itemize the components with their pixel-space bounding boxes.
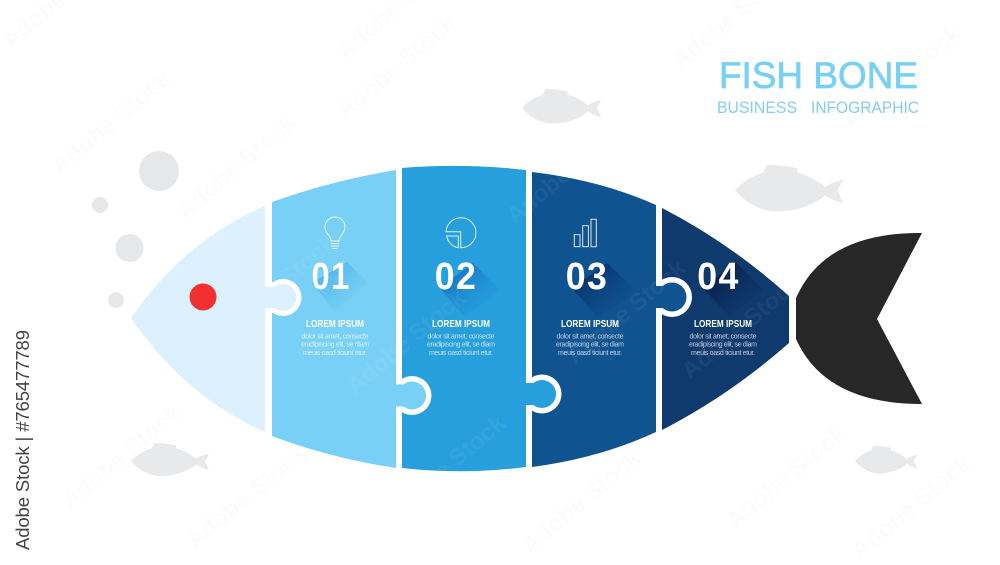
background watermarks on white: Adobe Stock xyxy=(847,449,977,565)
panel 4: darkest navy segment xyxy=(652,208,789,430)
stock watermarks: Adobe Stock xyxy=(342,284,472,400)
vertical credit line: Adobe Stock | #765477789 xyxy=(12,330,33,550)
panel 2: mid blue segment xyxy=(392,166,556,471)
body text 04: dolor sit amet, consecte xyxy=(690,333,757,340)
body text 04: meuis oasd ticiunt etur. xyxy=(691,350,755,357)
body text 03: dolor sit amet, consecte xyxy=(556,333,624,340)
body text 03 xyxy=(556,333,624,357)
body text 02: dolor sit amet, consecte xyxy=(428,333,495,340)
body text 03: meuis oasd ticiunt etur. xyxy=(558,350,622,357)
stock watermarks xyxy=(212,114,807,525)
title: FISH BONE xyxy=(719,54,918,96)
label 02: LOREM IPSUM xyxy=(432,319,490,330)
panel 1: light blue segment xyxy=(264,170,426,468)
subtitle xyxy=(717,98,919,117)
background watermarks on white: Adobe Stock xyxy=(517,444,647,560)
background fish: bottom right xyxy=(855,446,917,473)
label 03: LOREM IPSUM xyxy=(561,319,619,330)
background watermarks on white: Adobe Stock xyxy=(172,109,302,225)
number 03: 03 xyxy=(566,255,608,297)
long shadow 04 xyxy=(702,263,763,317)
body text 02 xyxy=(427,333,495,357)
stock watermarks: Adobe Stock xyxy=(382,409,512,525)
bubbles xyxy=(92,151,179,308)
stock watermarks: Adobe Stock xyxy=(562,254,692,370)
body text 01: eradipiscing elit, se diam xyxy=(301,342,369,348)
number 04: 04 xyxy=(697,255,740,297)
long shadow 01 xyxy=(312,262,368,312)
stock watermarks: Adobe Stock xyxy=(502,114,632,230)
stock watermarks: Adobe Stock xyxy=(212,229,342,345)
label 04: LOREM IPSUM xyxy=(694,319,752,330)
segment 1 content xyxy=(301,217,369,357)
segment 4 content xyxy=(689,255,763,357)
background fish: top right xyxy=(735,165,843,211)
background fish: bottom left xyxy=(131,443,209,476)
long shadow 03 xyxy=(572,263,638,317)
background watermarks on white: Adobe Stock xyxy=(332,9,462,125)
body text 01: dolor sit amet, consecte xyxy=(302,333,369,340)
background fish: top centre xyxy=(522,89,601,124)
eye xyxy=(190,284,216,310)
panel 3: dark blue segment xyxy=(522,172,686,467)
number 01: 01 xyxy=(312,255,350,298)
subtitle: BUSINESS xyxy=(717,98,797,117)
segment 3 content xyxy=(556,219,638,357)
body text 02: meuis oasd ticiunt etur. xyxy=(429,350,493,357)
background watermarks on white: Adobe Stock xyxy=(837,19,967,135)
fish head xyxy=(131,206,296,432)
icon: light bulb xyxy=(325,217,345,248)
body text 01: meuis oasd ticiunt etur. xyxy=(303,350,367,357)
label 01: LOREM IPSUM xyxy=(306,319,364,330)
background watermarks on white: Adobe Stock xyxy=(57,399,187,515)
background watermarks on white: Adobe Stock xyxy=(182,439,312,555)
segment 2 content xyxy=(427,218,500,357)
body text 02: eradipiscing elit, se diam xyxy=(427,342,495,348)
number 02: 02 xyxy=(435,255,477,297)
stock watermarks: Adobe Stock xyxy=(677,269,807,385)
icon: bar chart xyxy=(574,219,596,247)
tail xyxy=(796,233,922,404)
subtitle: INFOGRAPHIC xyxy=(811,98,919,117)
background watermarks on white: Adobe Stock xyxy=(47,64,177,180)
long shadow 02 xyxy=(440,263,500,317)
icon: pie chart xyxy=(446,218,476,248)
body text 04: eradipiscing elit, se diam xyxy=(689,342,757,348)
body text 04 xyxy=(689,333,757,357)
background watermarks on white: Adobe Stock xyxy=(722,419,852,535)
body text 03: eradipiscing elit, se diam xyxy=(556,342,624,348)
body text 01 xyxy=(301,333,369,357)
